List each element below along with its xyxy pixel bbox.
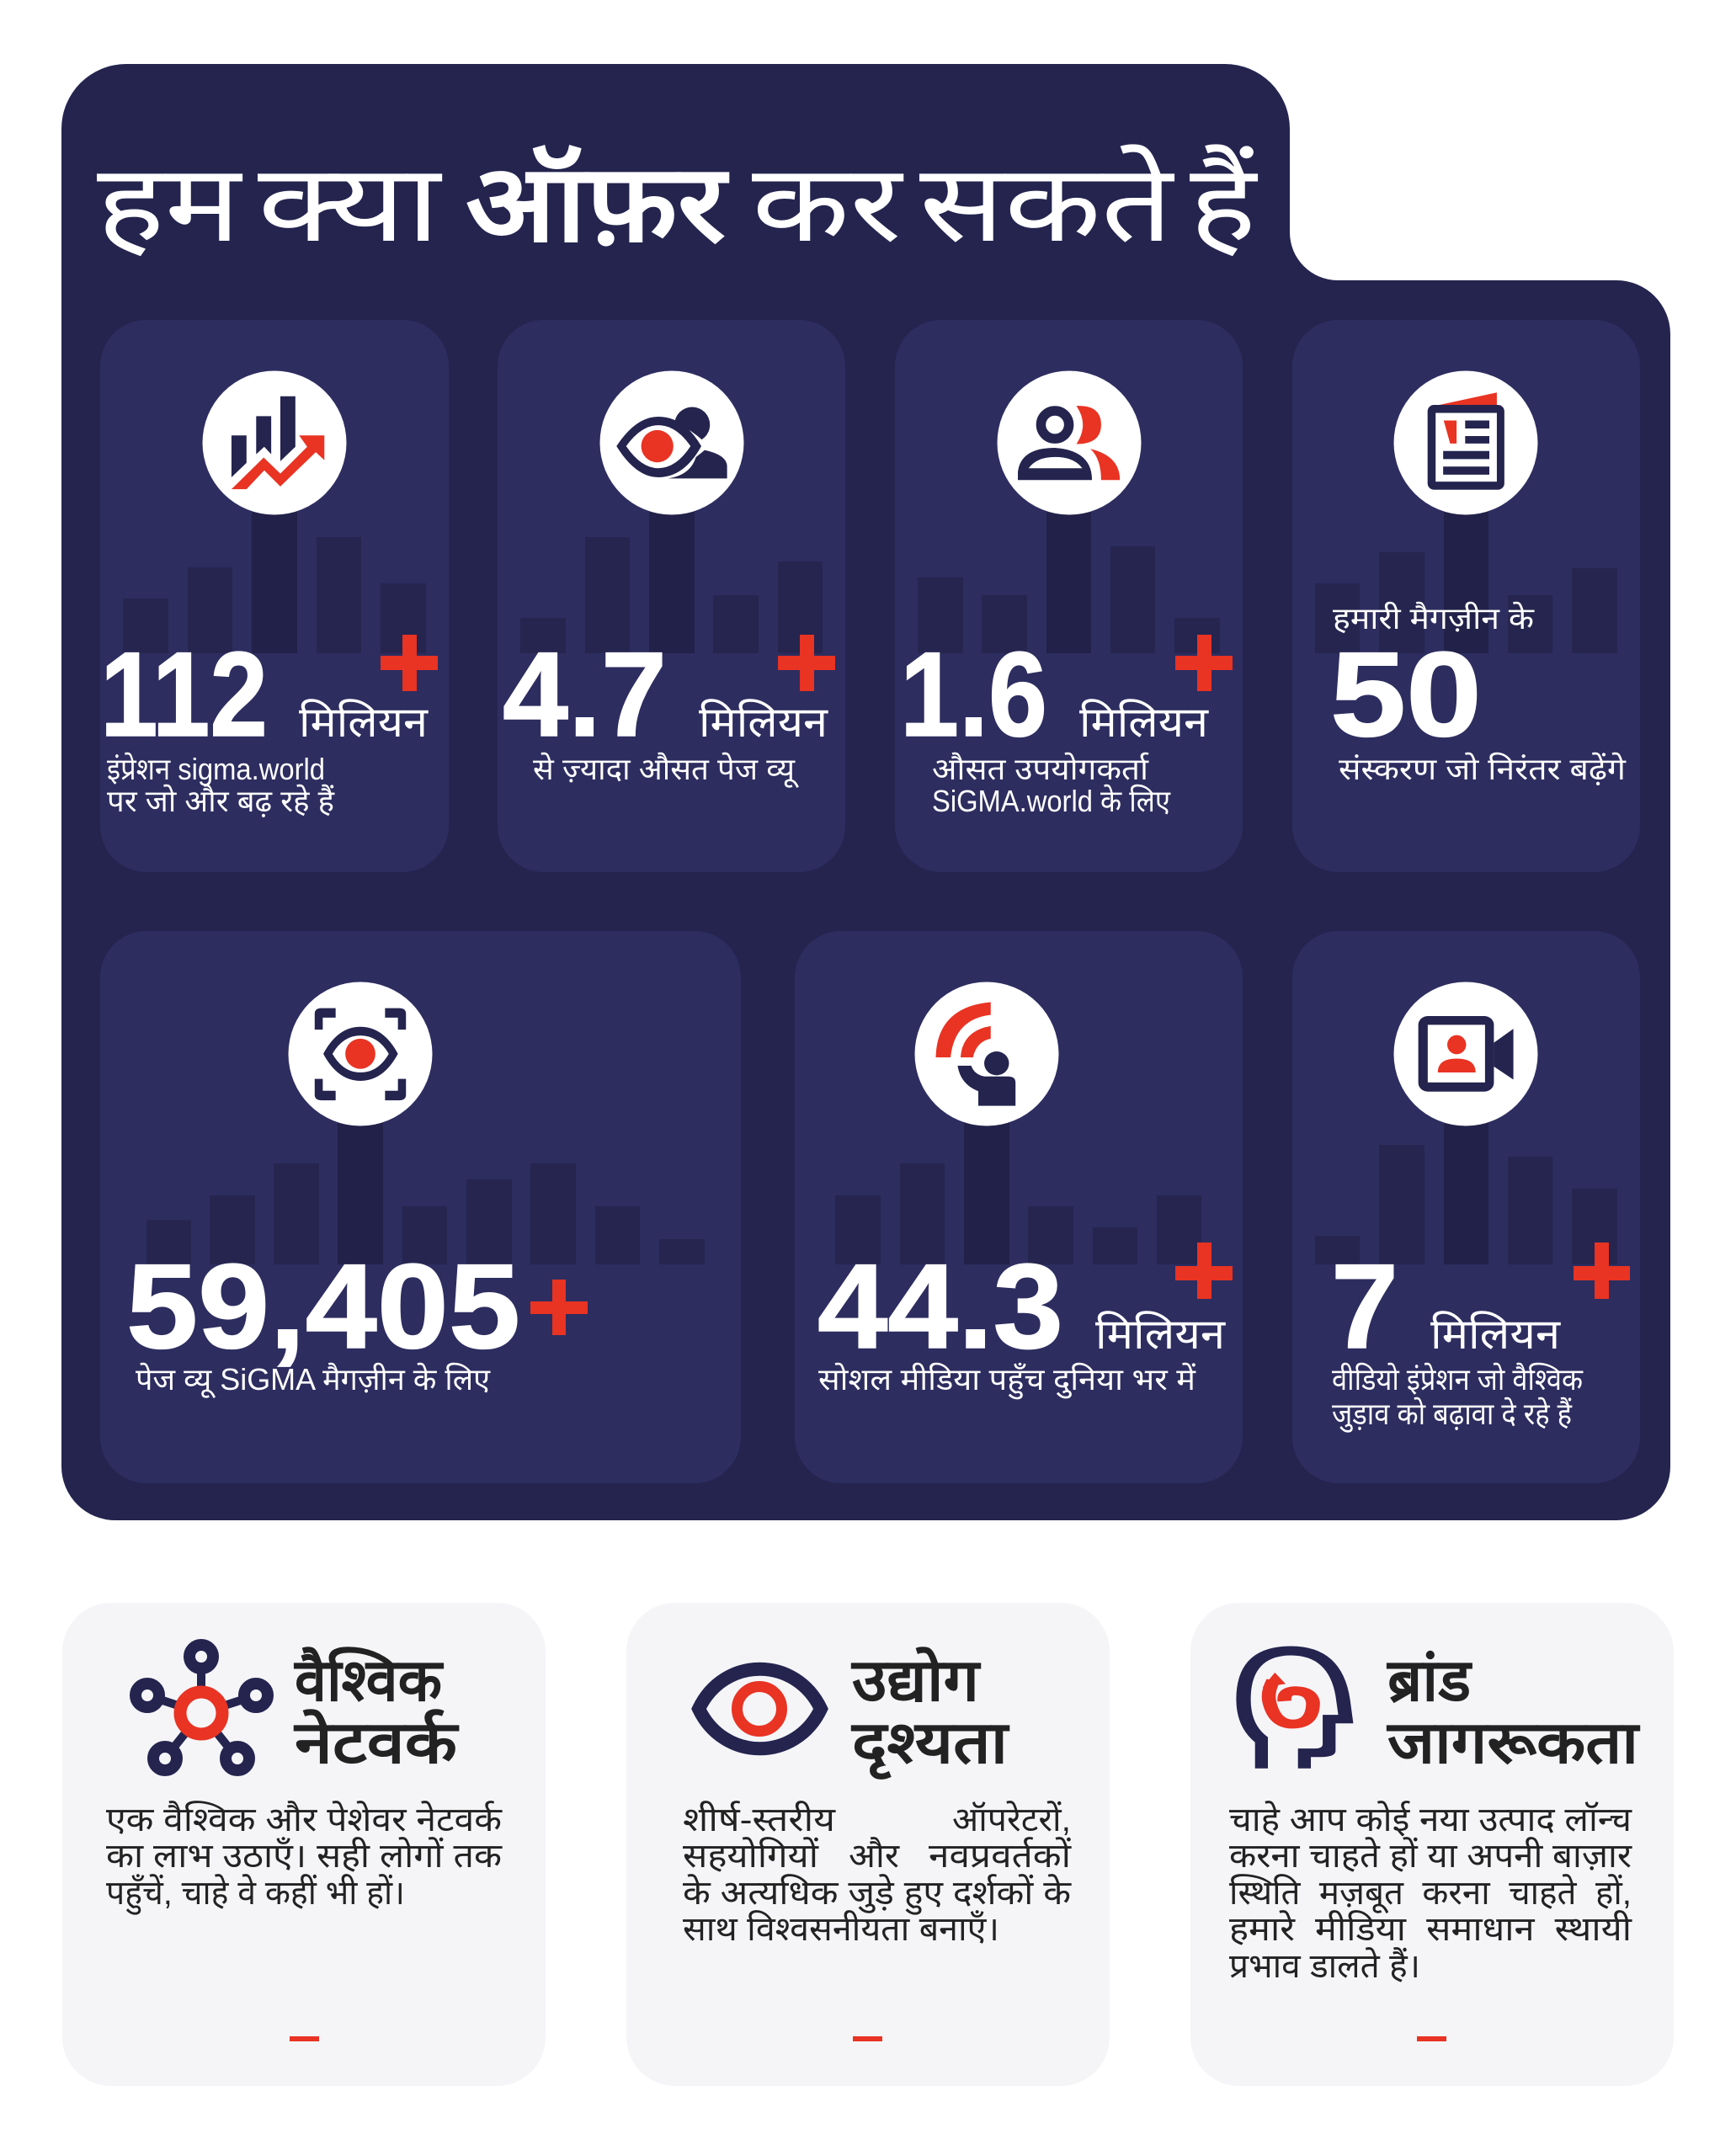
description: पर जो और बढ़ रहे हैं [107, 784, 335, 818]
description [1332, 1362, 1584, 1433]
body text: प्रभाव डालते हैं। [1229, 1947, 1420, 1985]
title [97, 144, 1258, 264]
panel: brand awareness [1190, 1603, 1674, 2086]
plus [381, 635, 438, 691]
description: औसत उपयोगकर्ता [932, 752, 1149, 786]
description [107, 752, 335, 818]
description: पेज व्यू SiGMA मैगज़ीन के लिए [136, 1362, 491, 1398]
title: हैं [1190, 144, 1258, 264]
panel: stat 4.7 million page views [498, 320, 845, 872]
stat value: 112 [100, 628, 268, 762]
heading: ब्रांड [1386, 1647, 1473, 1713]
body text: सहयोगियों [683, 1837, 819, 1875]
plus [1175, 635, 1233, 691]
icon: broadcasting person [914, 982, 1059, 1126]
heading: उद्योग [850, 1647, 982, 1713]
plus [530, 1280, 588, 1335]
stat value: 4.7 [503, 628, 667, 762]
bar chart: background [835, 1163, 1201, 1264]
body text: और [849, 1837, 900, 1875]
title: कर [752, 144, 904, 264]
bar chart: background [146, 1163, 705, 1264]
icon: eye [699, 1669, 821, 1748]
icon: chart with rising arrow [202, 370, 347, 515]
description: से ज़्यादा औसत पेज व्यू [533, 752, 799, 788]
body text [683, 1801, 1072, 1948]
body text: चाहे आप कोई नया उत्पाद लॉन्च [1229, 1801, 1632, 1838]
heading: जागरूकता [1386, 1710, 1641, 1775]
plus [1574, 1242, 1630, 1299]
title: ऑफ़र [466, 144, 730, 264]
panel: industry visibility [626, 1603, 1110, 2086]
description: वीडियो इंप्रेशन जो वैश्विक [1332, 1362, 1584, 1397]
body text: एक वैश्विक और पेशेवर नेटवर्क [106, 1801, 503, 1838]
body text: स्थिति मज़बूत करना चाहते हों, [1229, 1874, 1632, 1913]
description: इंप्रेशन sigma.world [107, 752, 325, 786]
heading [850, 1647, 1010, 1780]
body text: करना चाहते हों या अपनी बाज़ार [1229, 1837, 1632, 1875]
body text: हमारे मीडिया समाधान स्थायी [1229, 1910, 1632, 1948]
unit: मिलियन [1095, 1311, 1226, 1358]
panel: stat 44.3 million social reach [795, 931, 1243, 1483]
icon: newspaper [1394, 370, 1537, 515]
bar chart: background [520, 537, 823, 653]
body text [1229, 1801, 1632, 1985]
panel: stat 59,405 page views [100, 931, 741, 1483]
red dash [1417, 2036, 1446, 2041]
lead-in: हमारी मैगज़ीन के [1333, 601, 1535, 636]
icon: users [997, 370, 1142, 515]
panel: stat 7 million video impressions [1292, 931, 1640, 1483]
stat value: 7 [1331, 1240, 1398, 1374]
stat value: 50 [1330, 628, 1482, 762]
unit: मिलियन [1430, 1311, 1561, 1358]
stat value: 44.3 [817, 1240, 1063, 1374]
bar chart: background [1315, 1145, 1617, 1264]
icon: video camera [1394, 982, 1537, 1126]
unit: मिलियन [299, 699, 429, 746]
body text [106, 1801, 503, 1915]
panel: stat 50 magazine editions [1292, 320, 1640, 872]
title: क्या [258, 144, 442, 264]
plus [778, 635, 835, 691]
bar chart: background [1315, 552, 1617, 653]
description: संस्करण जो निरंतर बढ़ेंगे [1339, 752, 1627, 786]
unit: मिलियन [699, 699, 828, 746]
red dash [853, 2036, 882, 2041]
icon: network [136, 1645, 268, 1770]
red dash [290, 2036, 319, 2041]
title: सकते [919, 144, 1174, 264]
description: सोशल मीडिया पहुँच दुनिया भर में [818, 1362, 1197, 1400]
icon: eye with person [599, 370, 744, 515]
main dark panel [61, 64, 1670, 1520]
description: जुड़ाव को बढ़ावा दे रहे हैं [1332, 1397, 1573, 1433]
title: हम [97, 144, 243, 264]
heading [1386, 1647, 1641, 1775]
stat value: 1.6 [900, 628, 1047, 762]
panel: global network [62, 1603, 546, 2086]
heading [293, 1647, 460, 1775]
body text: शीर्ष-स्तरीय [683, 1801, 836, 1838]
bar chart: background [918, 546, 1220, 653]
description: SiGMA.world के लिए [932, 784, 1171, 818]
heading: वैश्विक [293, 1647, 444, 1713]
heading: नेटवर्क [293, 1709, 460, 1775]
icon: eye in focus frame [288, 982, 433, 1126]
body text: ऑपरेटरों, [952, 1801, 1071, 1838]
plus [1175, 1242, 1233, 1299]
stat value: 59,405 [126, 1240, 520, 1374]
unit: मिलियन [1079, 699, 1209, 746]
panel: stat 1.6 million users [895, 320, 1243, 872]
icon: head with spiral [1236, 1646, 1353, 1769]
body text: के अत्यधिक जुड़े हुए दर्शकों के [683, 1874, 1072, 1915]
body text: नवप्रवर्तकों [929, 1837, 1072, 1875]
description [932, 752, 1171, 818]
panel: stat 112 million impressions [100, 320, 449, 872]
heading: दृश्यता [850, 1710, 1010, 1780]
bar chart: background [123, 537, 426, 653]
body text: साथ विश्वसनीयता बनाएँ। [683, 1910, 999, 1948]
body text: का लाभ उठाएँ। सही लोगों तक [106, 1837, 503, 1875]
body text: पहुँचें, चाहे वे कहीं भी हों। [106, 1874, 405, 1915]
